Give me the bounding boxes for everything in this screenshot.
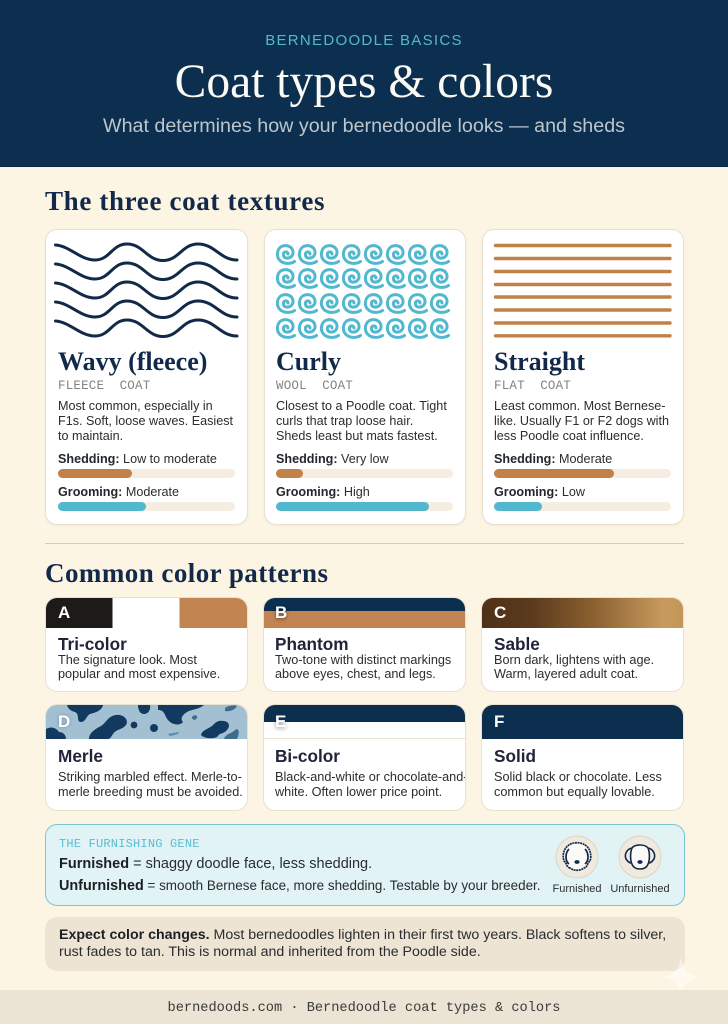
pattern description: Warm, layered adult coat. bbox=[494, 667, 638, 681]
pattern description bbox=[494, 770, 662, 799]
pattern description: Born dark, lightens with age. bbox=[494, 653, 654, 667]
description: to maintain. bbox=[58, 429, 123, 443]
swatch letter: C bbox=[494, 603, 506, 622]
main title: Coat types & colors bbox=[175, 56, 553, 108]
grooming bar bbox=[276, 502, 453, 511]
pattern name: Bi-color bbox=[275, 746, 340, 766]
shedding label: Shedding: Low to moderate bbox=[58, 452, 217, 466]
icon: unfurnished dog face bbox=[618, 836, 662, 878]
pattern description: The signature look. Most bbox=[58, 653, 197, 667]
description: F1s. Soft, loose waves. Easiest bbox=[58, 414, 233, 428]
description: Closest to a Poodle coat. Tight bbox=[276, 399, 447, 413]
pattern description bbox=[494, 653, 654, 681]
swatch: sable bbox=[482, 598, 683, 628]
callout text bbox=[59, 927, 666, 960]
description bbox=[494, 399, 669, 443]
pattern description: merle breeding must be avoided. bbox=[58, 785, 243, 799]
pattern description: Two-tone with distinct markings bbox=[275, 653, 451, 667]
furnished caption: Furnished bbox=[553, 883, 601, 895]
shedding bar bbox=[276, 469, 453, 478]
swatch: phantom bbox=[264, 598, 465, 628]
swatch: bi-color bbox=[264, 705, 465, 739]
callout: color changes bbox=[45, 917, 685, 971]
footer text: bernedoods.com · Bernedoodle coat types & colors bbox=[168, 1001, 560, 1016]
grooming bar bbox=[58, 502, 235, 511]
description: less Poodle coat influence. bbox=[494, 429, 644, 443]
pattern name: Phantom bbox=[275, 634, 349, 654]
icon: curl pattern bbox=[276, 244, 450, 339]
pattern description: Striking marbled effect. Merle-to- bbox=[58, 770, 242, 784]
pattern name: Solid bbox=[494, 746, 536, 766]
unfurnished caption: Unfurnished bbox=[610, 883, 670, 895]
coat name: Straight bbox=[494, 347, 585, 376]
callout label: THE FURNISHING GENE bbox=[59, 837, 200, 851]
grooming label: Grooming: High bbox=[276, 485, 370, 499]
panel: tri-color bbox=[45, 597, 248, 692]
pattern description bbox=[58, 653, 220, 681]
pattern description: white. Often lower price point. bbox=[275, 785, 442, 799]
coat name: Curly bbox=[276, 347, 341, 376]
heading: color patterns: Common color patterns bbox=[45, 558, 328, 588]
pattern description bbox=[58, 770, 243, 799]
swatch: tri-color bbox=[46, 598, 247, 628]
panel: merle bbox=[45, 704, 248, 811]
callout text: Expect color changes. Most bernedoodles lighten in their first two years. Black softens to silver, bbox=[59, 927, 666, 943]
pattern description bbox=[275, 770, 466, 799]
grooming label: Grooming: Moderate bbox=[58, 485, 179, 499]
callout: furnishing gene bbox=[45, 824, 685, 906]
heading: coat textures: The three coat textures bbox=[45, 186, 325, 216]
pattern description: common but equally lovable. bbox=[494, 785, 655, 799]
description bbox=[276, 399, 447, 443]
icon: furnished dog face bbox=[556, 836, 598, 878]
icon: wavy lines bbox=[54, 242, 238, 338]
coat subtype: FLAT COAT bbox=[494, 379, 571, 393]
pattern description: Solid black or chocolate. Less bbox=[494, 770, 662, 784]
coat subtype: FLEECE COAT bbox=[58, 379, 150, 393]
shedding label: Shedding: Very low bbox=[276, 452, 389, 466]
eyebrow label: BERNEDOODLE BASICS bbox=[265, 32, 463, 49]
decorative sparkle bbox=[663, 958, 699, 990]
grooming bar bbox=[494, 502, 671, 511]
swatch letter: B bbox=[275, 603, 287, 622]
coat name: Wavy (fleece) bbox=[58, 347, 207, 376]
grooming label: Grooming: Low bbox=[494, 485, 585, 499]
unfurnished definition: Unfurnished = smooth Bernese face, more shedding. Testable by your breeder. bbox=[59, 878, 541, 894]
pattern name: Sable bbox=[494, 634, 540, 654]
shedding bar bbox=[494, 469, 671, 478]
merle blotches bbox=[46, 705, 239, 739]
description: Most common, especially in bbox=[58, 399, 213, 413]
description: Least common. Most Bernese- bbox=[494, 399, 666, 413]
icon: straight lines bbox=[494, 244, 672, 338]
shedding bar bbox=[58, 469, 235, 478]
swatch: merle bbox=[46, 705, 247, 739]
panel: wavy coat bbox=[45, 229, 248, 525]
panel: solid bbox=[481, 704, 684, 811]
panel: bi-color bbox=[263, 704, 466, 811]
coat subtype: WOOL COAT bbox=[276, 379, 353, 393]
furnished definition: Furnished = shaggy doodle face, less shedding. bbox=[59, 856, 372, 872]
footer bbox=[0, 990, 728, 1024]
swatch letter: F bbox=[494, 712, 504, 731]
description: like. Usually F1 or F2 dogs with bbox=[494, 414, 669, 428]
pattern description bbox=[275, 653, 451, 681]
pattern description: popular and most expensive. bbox=[58, 667, 220, 681]
swatch letter: D bbox=[58, 712, 70, 731]
pattern name: Merle bbox=[58, 746, 103, 766]
panel: curly coat bbox=[264, 229, 466, 525]
swatch letter: E bbox=[275, 712, 286, 731]
panel: sable bbox=[481, 597, 684, 692]
pattern name: Tri-color bbox=[58, 634, 127, 654]
header banner bbox=[0, 0, 728, 167]
description: curls that trap loose hair. bbox=[276, 414, 413, 428]
panel: phantom bbox=[263, 597, 466, 692]
description bbox=[58, 399, 233, 443]
callout text: rust fades to tan. This is normal and inherited from the Poodle side. bbox=[59, 944, 481, 960]
swatch letter: A bbox=[58, 603, 70, 622]
panel: straight coat bbox=[482, 229, 684, 525]
description: Sheds least but mats fastest. bbox=[276, 429, 438, 443]
swatch: solid bbox=[482, 705, 683, 739]
shedding label: Shedding: Moderate bbox=[494, 452, 612, 466]
pattern description: above eyes, chest, and legs. bbox=[275, 667, 436, 681]
pattern description: Black-and-white or chocolate-and- bbox=[275, 770, 466, 784]
subtitle: What determines how your bernedoodle looks — and sheds bbox=[103, 115, 625, 137]
